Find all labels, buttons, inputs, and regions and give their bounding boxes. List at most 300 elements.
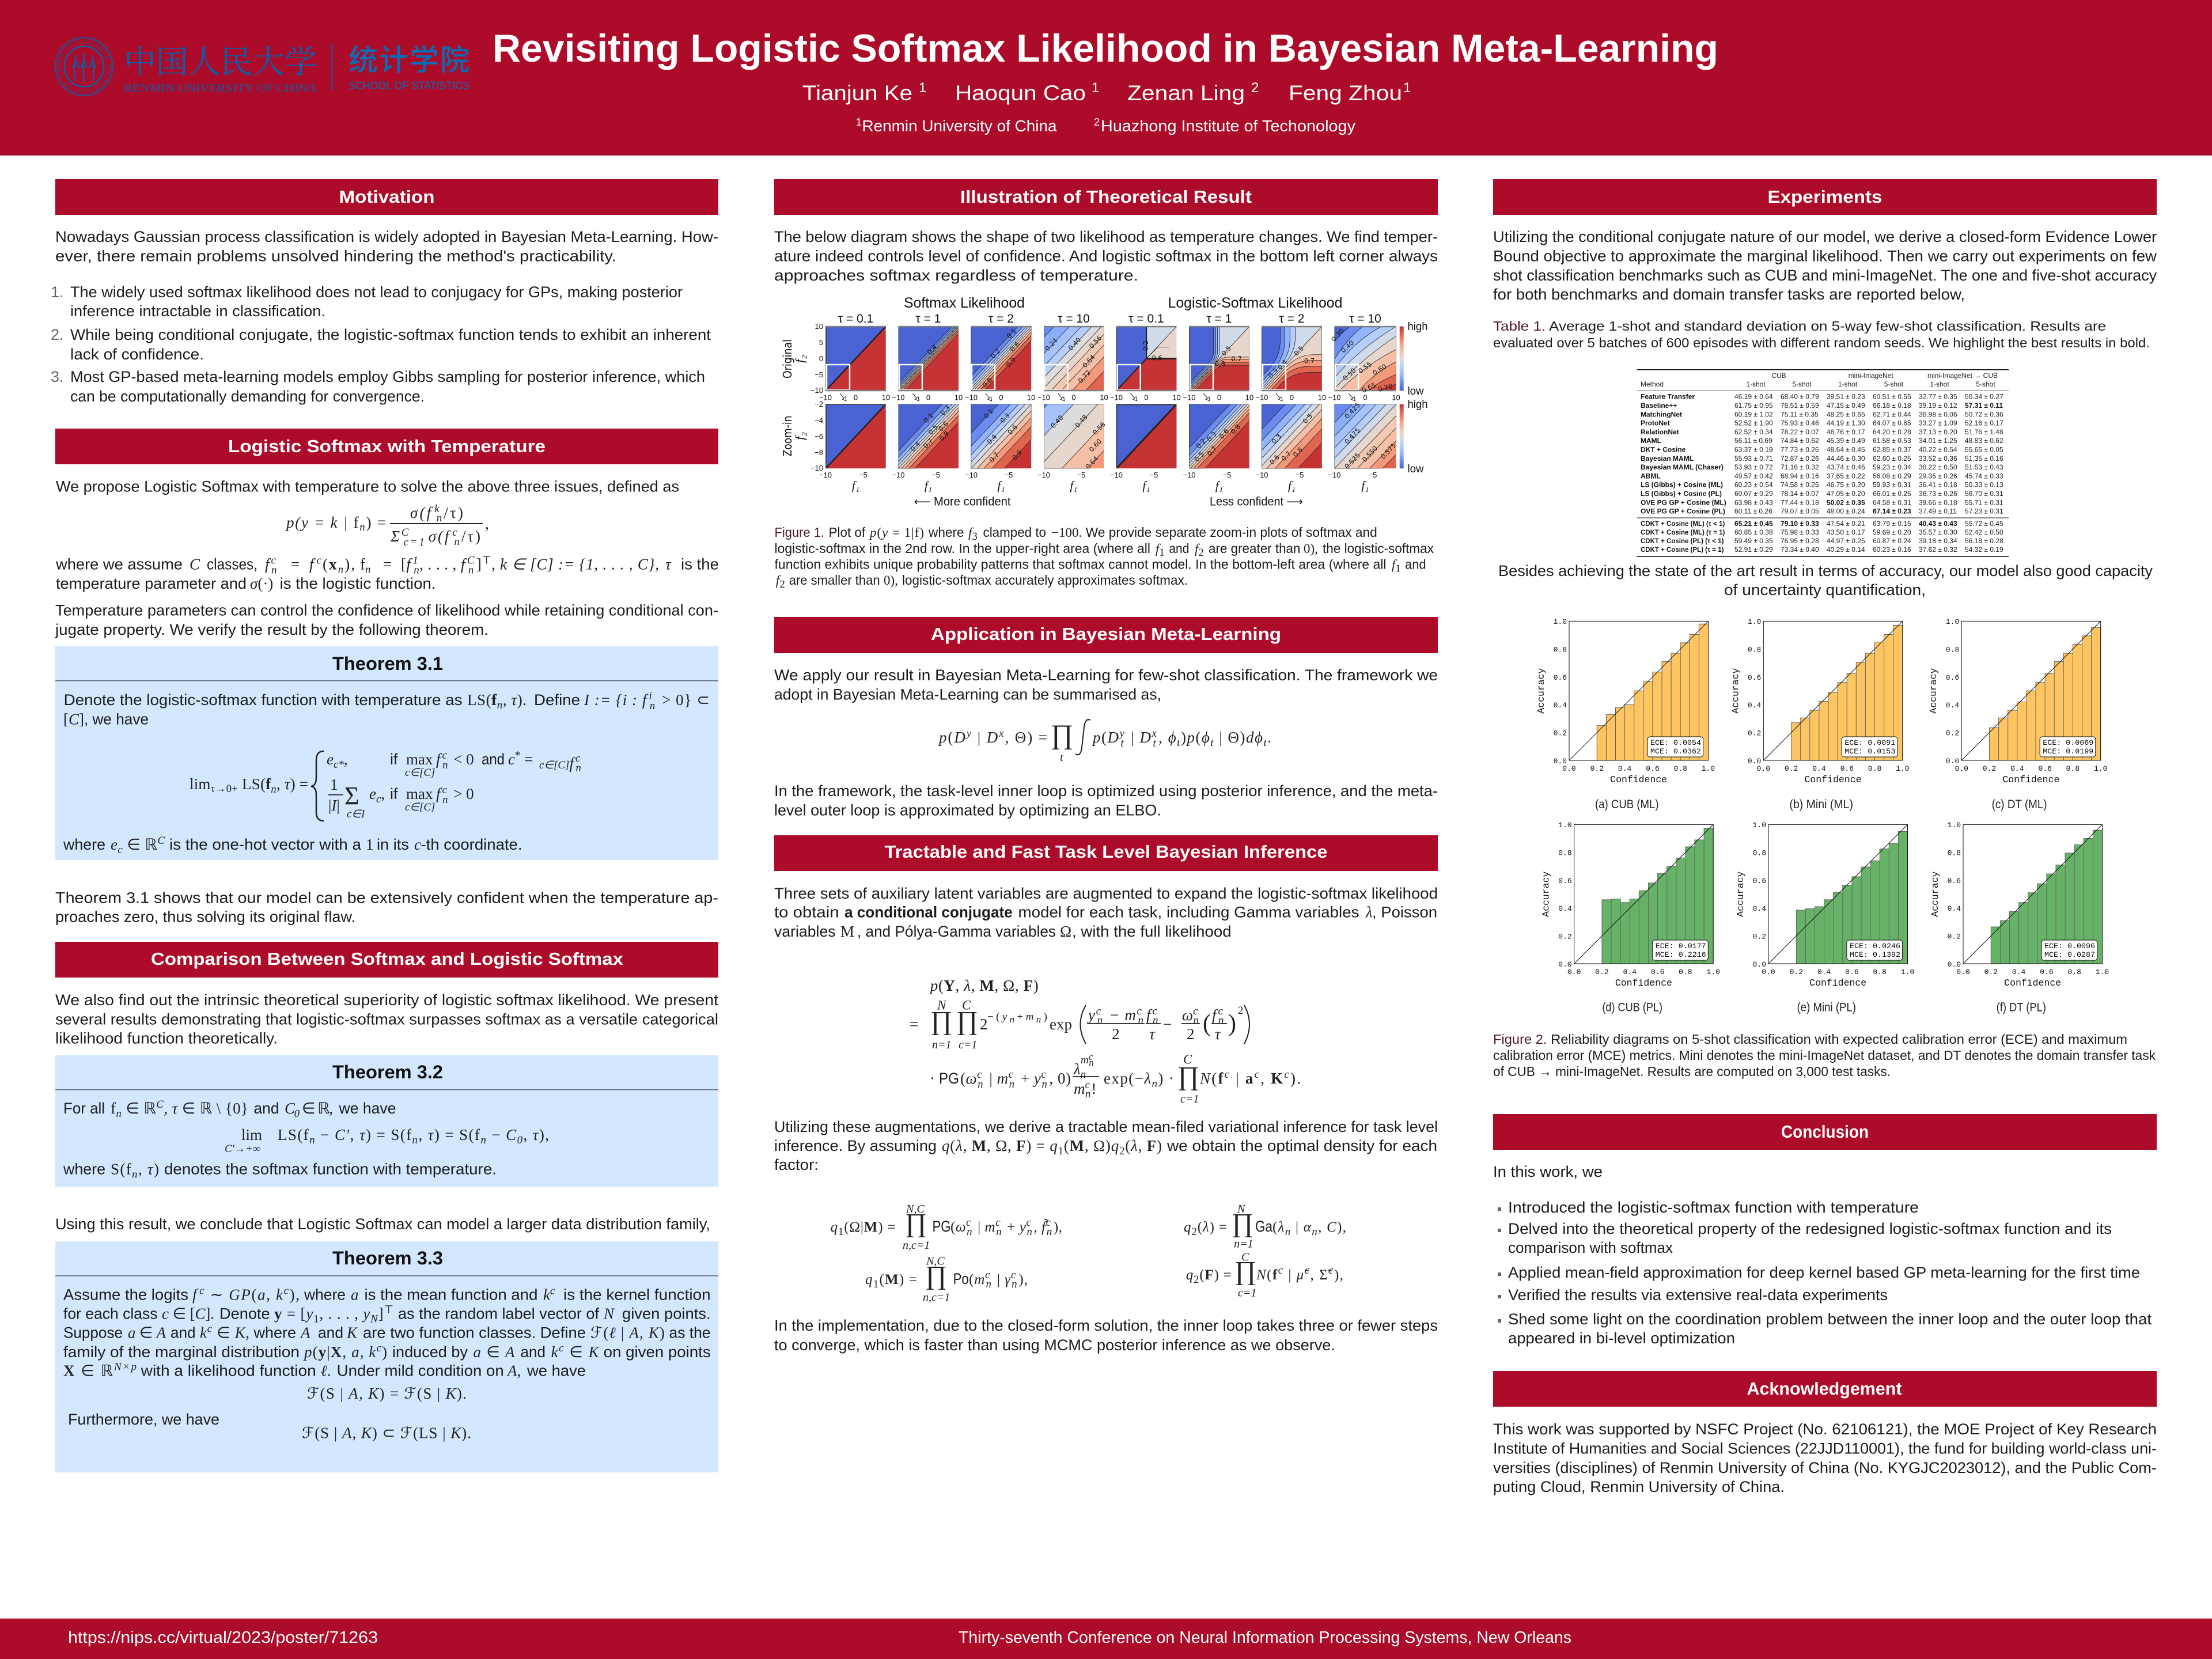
equation: full likelihood: ) bbox=[1044, 1011, 1047, 1023]
text: utilizing augmentations: factor: bbox=[774, 1156, 819, 1173]
chart: reliability CUB (PL): 0.8 bbox=[1558, 849, 1572, 857]
equation: q1 factors: 1 bbox=[838, 1226, 843, 1238]
chart: reliability DT (ML): 0.2 bbox=[1946, 729, 1959, 737]
equation: q1 factors: f̃ bbox=[1041, 1219, 1046, 1235]
table rows: ABML bbox=[1641, 472, 1661, 480]
subcaptions: ML row: (c) DT (ML) bbox=[1992, 798, 2047, 811]
equation: full likelihood: n bbox=[1218, 1014, 1224, 1027]
contour labels: 0.5 bbox=[1301, 412, 1314, 425]
equation: function family inclusion: ℱ(S | A, K) ⊂ ℱ(LS | K). bbox=[302, 1425, 471, 1442]
x axis labels f1 bbox=[852, 479, 1369, 493]
list: three problems: 1. bbox=[51, 283, 64, 301]
theorem 3.3 title: Theorem 3.3 bbox=[332, 1248, 443, 1268]
equation: likelihood definition: σ(f bbox=[410, 504, 431, 521]
equation: meta-learning framework: x bbox=[1152, 728, 1157, 740]
caption: figure 1: 3 bbox=[972, 531, 978, 543]
theorem 3.2 closing line: , bbox=[138, 1161, 147, 1178]
axis ticks: 10 bbox=[1318, 393, 1326, 402]
text: uncertainty quantification bbox=[1498, 562, 2153, 599]
equation: full likelihood: ). bbox=[1290, 1070, 1301, 1087]
chart: reliability DT (PL): 0.2 bbox=[1984, 968, 1998, 976]
equation: limit of logistic-softmax: c bbox=[575, 752, 581, 764]
chart: reliability CUB (ML): 0.2 bbox=[1590, 764, 1604, 773]
text: experiments intro: Bound objective to approximate the marginal likelihood. Then we carry out experiments on few bbox=[1493, 248, 2157, 265]
equation: q2 factors: α bbox=[1304, 1219, 1311, 1235]
equation: softmax limit: C bbox=[506, 1126, 516, 1143]
table rows: 48.64 ± 0.45 bbox=[1827, 446, 1865, 454]
text: uncertainty quantification: of uncertainty quantification, bbox=[1724, 581, 1926, 599]
equation: full likelihood: m bbox=[1081, 1054, 1089, 1066]
equation: full likelihood: exp(−λ bbox=[1104, 1070, 1151, 1087]
table rows: 78.51 ± 0.59 bbox=[1781, 402, 1819, 410]
text: temperature parameters: jugate property. We verify the result by the following theorem. bbox=[55, 621, 488, 638]
equation: limit of logistic-softmax: c bbox=[508, 751, 515, 768]
table rows: 63.37 ± 0.19 bbox=[1734, 446, 1773, 454]
chart: reliability DT (PL): MCE: 0.0287 bbox=[2044, 950, 2095, 959]
theorem 3.3 statement: X ∈ ℝ bbox=[63, 1362, 113, 1380]
theorem 3.3 statement: k bbox=[551, 1343, 558, 1361]
theorem 3.3 statement: K bbox=[589, 1343, 599, 1361]
chart: reliability CUB (ML): 0.4 bbox=[1554, 701, 1567, 710]
equation: q2 factors: c bbox=[1278, 1264, 1283, 1277]
table rows: 61.75 ± 0.95 bbox=[1734, 402, 1773, 410]
equation: q1 factors: c bbox=[1046, 1217, 1051, 1229]
text: using this result: Using this result, we conclude that Logistic Softmax can model a larger data distribution family, bbox=[55, 1215, 710, 1233]
text: assumptions with inline math: ⊤ bbox=[482, 555, 491, 567]
chart: reliability CUB (PL): ECE: 0.0177 bbox=[1656, 942, 1706, 950]
table rows: 48.83 ± 0.62 bbox=[1965, 437, 2003, 445]
contour labels: 0.9 bbox=[1005, 356, 1017, 369]
table header: 1-shot bbox=[1930, 380, 1949, 388]
table rows: 64.20 ± 0.28 bbox=[1873, 428, 1911, 436]
x axis labels f1: f₁ bbox=[997, 479, 1005, 493]
equation: q1 factors: n,c=1 bbox=[903, 1239, 930, 1252]
equation: q2 factors: F) = bbox=[1205, 1267, 1232, 1283]
text: assumptions with inline math: classes, bbox=[207, 556, 257, 573]
chart: reliability DT (PL) bbox=[1930, 821, 2109, 988]
equation: meta-learning framework: x bbox=[998, 728, 1004, 740]
table rows: 78.14 ± 0.07 bbox=[1781, 490, 1819, 498]
chart: reliability CUB (PL): Accuracy bbox=[1541, 871, 1552, 917]
table rows: 50.34 ± 0.27 bbox=[1965, 393, 2003, 401]
chart: reliability DT (ML): 0.2 bbox=[1983, 764, 1996, 773]
equation: limit of logistic-softmax: , bbox=[381, 785, 385, 802]
equation: q2 factors: n=1 bbox=[1234, 1238, 1253, 1251]
text: illustration intro: The below diagram shows the shape of two likelihood as temperature changes. We find temper- bbox=[774, 228, 1438, 245]
equation: q1 factors: γ bbox=[1005, 1272, 1010, 1287]
theorem 3.2 statement: ∈ ℝ bbox=[122, 1100, 156, 1117]
contour labels: 0.50 bbox=[1341, 366, 1358, 382]
axis ticks: 0 bbox=[926, 393, 930, 402]
table rows bbox=[1641, 393, 2003, 554]
table rows: 36.22 ± 0.50 bbox=[1919, 463, 1957, 471]
text: comparison intro bbox=[55, 991, 719, 1047]
theorem 3.3 statement: ∈ bbox=[565, 1343, 588, 1361]
text: conclusion intro: In this work, we bbox=[1493, 1163, 1603, 1180]
equation: full likelihood: n bbox=[1009, 1078, 1014, 1090]
equation: q1 factors: ), bbox=[1054, 1219, 1062, 1235]
heading: Experiments bbox=[1493, 179, 2157, 215]
chart: reliability CUB (PL): 0.0 bbox=[1567, 968, 1581, 976]
x axis labels f1: f₁ bbox=[1361, 479, 1369, 493]
heading: Illustration of Theoretical Result bbox=[774, 179, 1438, 215]
equation: full likelihood: τ bbox=[1215, 1025, 1221, 1043]
table rows: 51.35 ± 0.16 bbox=[1965, 454, 2003, 463]
caption: figure 1: f bbox=[776, 573, 779, 588]
list: three problems bbox=[51, 283, 711, 405]
table rows: 50.33 ± 0.13 bbox=[1965, 481, 2003, 489]
table header: 1-shot bbox=[1838, 380, 1858, 388]
table rows: MAML bbox=[1641, 437, 1661, 445]
equation: full likelihood: exp bbox=[1050, 1016, 1072, 1033]
chart: reliability DT (ML): ECE: 0.0069 bbox=[2043, 738, 2093, 747]
chart: reliability DT (PL): 0.6 bbox=[2040, 968, 2054, 976]
table rows: ProtoNet bbox=[1641, 419, 1670, 427]
equation: meta-learning framework: t bbox=[1263, 737, 1267, 749]
table rows: LS (Gibbs) + Cosine (PL) bbox=[1641, 490, 1722, 498]
chart: reliability Mini (ML): 0.4 bbox=[1812, 764, 1826, 773]
panel: softmax tau 1 original bbox=[899, 327, 959, 390]
table rows: 55.65 ± 0.05 bbox=[1965, 446, 2003, 454]
text: implementation: to converge, which is faster than using MCMC posterior inference as we observe. bbox=[774, 1336, 1335, 1354]
equation: full likelihood: c bbox=[1225, 1069, 1230, 1081]
table rows: 51.76 ± 1.48 bbox=[1965, 428, 2003, 436]
theorem 3.3 statement: c bbox=[559, 1342, 564, 1354]
authors: 1 bbox=[1403, 80, 1411, 96]
figure 1 row labels bbox=[781, 339, 807, 456]
text: comparison intro: several results demonstrating that logistic-softmax surpasses softmax as a versatile categorical bbox=[55, 1011, 718, 1028]
axis ticks: 5 bbox=[819, 338, 823, 347]
table: few-shot classification results: Method bbox=[1641, 380, 1664, 388]
equation: meta-learning framework: ∏ bbox=[1051, 719, 1074, 750]
axis ticks: −10 bbox=[1037, 393, 1050, 402]
text: assumptions with inline math: f bbox=[461, 556, 465, 573]
equation: q1 factors: , bbox=[1034, 1219, 1041, 1235]
equation: limit of logistic-softmax: n bbox=[442, 794, 448, 806]
theorem 3.3 statement: c ∈ [C]. bbox=[162, 1305, 214, 1322]
chart: reliability Mini (PL) bbox=[1735, 821, 1914, 988]
theorem 3.3 statement: ∼ bbox=[205, 1286, 228, 1304]
text: assumptions with inline math: n bbox=[414, 565, 419, 577]
equation: full likelihood: c bbox=[1255, 1069, 1260, 1081]
authors: 2 bbox=[1251, 80, 1259, 96]
equation: q2 factors: n bbox=[1285, 1226, 1290, 1238]
figure 1 row labels: Zoom-in bbox=[781, 416, 794, 456]
chart: reliability CUB (ML): 0.8 bbox=[1673, 764, 1687, 773]
table rows: OVE PG GP + Cosine (ML) bbox=[1641, 498, 1726, 506]
caption: figure 1: f bbox=[1156, 541, 1159, 556]
theorem 3.3 statement: N bbox=[603, 1305, 615, 1322]
equation: full likelihood: ! bbox=[1091, 1080, 1096, 1097]
theorem 3.1 statement: [C] bbox=[63, 711, 84, 728]
equation: q2 factors: | bbox=[1291, 1219, 1303, 1235]
text: implementation: In the implementation, due to the closed-form solution, the inner loop takes three or fewer steps bbox=[774, 1317, 1438, 1334]
footer link: https://nips.cc/virtual/2023/poster/71263 bbox=[68, 1628, 378, 1647]
contour labels: 0.5 bbox=[1292, 344, 1305, 357]
text: auxiliary variables: , and Pólya-Gamma variables bbox=[857, 923, 1056, 940]
table rows: 56.08 ± 0.29 bbox=[1873, 472, 1911, 480]
table rows: 59.49 ± 0.35 bbox=[1734, 537, 1773, 545]
text: assumptions with inline math: 1 bbox=[412, 555, 418, 567]
caption: figure 1: 2 bbox=[1198, 547, 1204, 559]
text: assumptions with inline math: [f bbox=[401, 556, 411, 573]
equation: full likelihood: n bbox=[1085, 1088, 1090, 1100]
chart: reliability DT (ML): 1.0 bbox=[2094, 764, 2107, 773]
equation: q1 factors: ), bbox=[1019, 1272, 1028, 1287]
axis ticks: 10 bbox=[1172, 393, 1181, 402]
theorem 3.2 statement: we have bbox=[339, 1100, 396, 1117]
table rows: 62.52 ± 0.34 bbox=[1734, 428, 1773, 436]
equation: full likelihood: c bbox=[977, 1069, 982, 1081]
table rows: 64.07 ± 0.65 bbox=[1873, 419, 1911, 427]
colorbars: high bbox=[1408, 399, 1427, 411]
caption: figure 1 bbox=[774, 525, 1434, 590]
table rows: 34.01 ± 1.25 bbox=[1919, 437, 1957, 445]
table rows: Baseline++ bbox=[1641, 402, 1677, 410]
equation: meta-learning framework: ) bbox=[1181, 729, 1186, 746]
theorem 3.3 statement: c bbox=[284, 1285, 289, 1297]
theorem 3.2 statement: and bbox=[253, 1100, 279, 1117]
panel: softmax tau 2 zoom-in bbox=[971, 404, 1031, 468]
heading: Motivation bbox=[55, 179, 718, 215]
chart: reliability DT (ML): 1.0 bbox=[1946, 618, 1959, 626]
axis ticks: 10 bbox=[1392, 393, 1400, 402]
contour labels: 0.4 bbox=[926, 343, 938, 356]
table rows: 60.07 ± 0.29 bbox=[1734, 490, 1773, 498]
equation: meta-learning framework: t bbox=[1177, 737, 1180, 749]
contour labels: 0.6 bbox=[1218, 427, 1230, 440]
equation: limit of logistic-softmax: max bbox=[406, 751, 433, 768]
equation: likelihood definition: /τ) bbox=[444, 504, 463, 521]
theorem 3.1 statement: i bbox=[649, 690, 652, 702]
caption: figure 1: logistic-softmax in the 2nd row. In the upper-right area (where all bbox=[774, 541, 1150, 556]
axis ticks: −10 bbox=[810, 386, 823, 395]
panel: logistic-softmax tau 2 original bbox=[1262, 326, 1322, 391]
table rows: 52.52 ± 1.90 bbox=[1734, 419, 1773, 427]
theorem 3.3 statement: GP(a, k bbox=[229, 1286, 283, 1304]
panel: logistic-softmax tau 10 zoom-in bbox=[1335, 404, 1396, 468]
table rows: 66.18 ± 0.18 bbox=[1873, 402, 1911, 410]
table header: mini-ImageNet → CUB bbox=[1927, 372, 1998, 380]
chart: reliability Mini (PL): ECE: 0.0246 bbox=[1850, 942, 1900, 950]
theorem 3.2 closing line: S(f bbox=[111, 1161, 131, 1178]
equation: full likelihood: (ω bbox=[960, 1070, 977, 1087]
table rows: 51.53 ± 0.43 bbox=[1965, 463, 2003, 471]
colorbars: high bbox=[1408, 321, 1427, 333]
theorem 3.3 statement: a ∈ A bbox=[474, 1343, 515, 1361]
equation: meta-learning framework: t bbox=[1060, 751, 1063, 764]
figure 1 temperature labels: τ = 2 bbox=[988, 312, 1014, 325]
table rows: 71.16 ± 0.32 bbox=[1781, 463, 1819, 471]
equation: likelihood definition: , bbox=[485, 515, 489, 532]
equation: q2 factors: μ̃ bbox=[1297, 1267, 1304, 1283]
equation: full likelihood: n bbox=[1089, 1057, 1094, 1068]
theorem 3.3 statement: K bbox=[346, 1324, 358, 1341]
table rows: 37.65 ± 0.22 bbox=[1827, 472, 1865, 480]
equation: limit of logistic-softmax: e bbox=[327, 751, 334, 768]
caption: figure 1: −100. bbox=[1051, 525, 1082, 540]
chart: reliability CUB (ML): 0.2 bbox=[1554, 729, 1567, 737]
text: assumptions with inline math: , bbox=[491, 556, 495, 573]
footer band bbox=[0, 1619, 2212, 1659]
chart: reliability CUB (PL): MCE: 0.2216 bbox=[1656, 950, 1706, 959]
theorem 3.3 statement: as the bbox=[669, 1324, 711, 1341]
authors: 1 bbox=[1092, 80, 1099, 96]
text: application intro: We apply our result in Bayesian Meta-Learning for few-shot classification. The framework we bbox=[774, 666, 1438, 684]
contour labels: 0.30 bbox=[1330, 327, 1346, 343]
equation: limit of logistic-softmax: n bbox=[271, 783, 276, 796]
text: utilizing augmentations: q(λ, M, Ω, F) = q bbox=[942, 1137, 1058, 1154]
equation: full likelihood: | bbox=[985, 1070, 997, 1087]
table rows: 29.35 ± 0.26 bbox=[1919, 472, 1957, 480]
theorem 3.3 statement: k bbox=[200, 1324, 207, 1341]
theorem 3.1 closing line: where bbox=[63, 836, 105, 853]
axis ticks: 0 bbox=[819, 354, 823, 363]
table rows: 56.70 ± 0.31 bbox=[1965, 490, 2003, 498]
figure 1 temperature labels: τ = 1 bbox=[1207, 312, 1232, 325]
equation: meta-learning framework: t bbox=[1120, 737, 1124, 749]
table rows: 75.98 ± 0.33 bbox=[1781, 528, 1819, 536]
table rows: CDKT + Cosine (ML) (τ < 1) bbox=[1641, 521, 1725, 528]
table rows: 78.22 ± 0.07 bbox=[1781, 428, 1819, 436]
header band bbox=[0, 0, 2212, 156]
equation: limit of logistic-softmax: c bbox=[376, 793, 381, 805]
text: experiments intro bbox=[1493, 228, 2157, 303]
contour labels: 0.550 bbox=[1361, 444, 1379, 464]
theorem 3.2 statement: f bbox=[111, 1100, 116, 1117]
equation: limit of logistic-softmax: e bbox=[369, 785, 376, 802]
contour labels: 0.40 bbox=[1049, 414, 1065, 430]
equation: limit of logistic-softmax: , bbox=[344, 751, 348, 768]
axis ticks: −10 bbox=[1328, 471, 1341, 479]
equation: q1 factors: y bbox=[1020, 1219, 1026, 1235]
equation: q2 factors: c=1 bbox=[1238, 1287, 1256, 1300]
equation: softmax limit: , bbox=[418, 1126, 427, 1143]
axis ticks: −10 bbox=[1183, 471, 1196, 479]
chart: reliability Mini (ML): 0.4 bbox=[1748, 701, 1761, 710]
chart: reliability Mini (PL): 0.4 bbox=[1753, 904, 1766, 913]
figure 1 temperature labels: τ = 0.1 bbox=[838, 312, 873, 325]
equation: q1 factors: m bbox=[985, 1219, 995, 1235]
table rows: 43.50 ± 0.17 bbox=[1827, 528, 1865, 536]
table rows: 40.22 ± 0.54 bbox=[1919, 446, 1957, 454]
subcaptions: ML row bbox=[1595, 798, 2047, 811]
x axis labels f1: f₁ bbox=[1288, 479, 1296, 493]
chart: reliability CUB (ML): 1.0 bbox=[1554, 618, 1567, 626]
x axis labels f1: f₁ bbox=[925, 479, 932, 493]
logo: divider and school of statistics: 统计学院 bbox=[349, 36, 469, 79]
theorem 3.2 statement: ∈ ℝ, bbox=[299, 1100, 333, 1117]
chart: reliability CUB (PL): 0.4 bbox=[1558, 904, 1572, 913]
chart: reliability CUB (ML): 0.4 bbox=[1618, 764, 1631, 773]
theorem 3.2 statement bbox=[63, 1099, 396, 1120]
table rows: 56.11 ± 0.69 bbox=[1734, 437, 1772, 445]
equation: limit of logistic-softmax: |I| bbox=[328, 797, 340, 814]
equation: softmax limit: n bbox=[412, 1134, 418, 1146]
chart: reliability DT (PL): 0.8 bbox=[1948, 849, 1961, 857]
theorem 3.1 statement: , we have bbox=[84, 711, 149, 728]
equation: limit of logistic-softmax: lim bbox=[190, 775, 210, 793]
equation: q1 factors: ∏ bbox=[925, 1260, 947, 1290]
equation: full likelihood: a bbox=[1245, 1070, 1253, 1087]
text: assumptions with inline math: is the logistic function. bbox=[280, 575, 436, 592]
equation: q1 factors: 1 bbox=[873, 1278, 878, 1290]
table rows: 77.73 ± 0.26 bbox=[1781, 446, 1819, 454]
theorem 3.3 statement: are two function classes. Define bbox=[363, 1324, 586, 1341]
axis ticks: 10 bbox=[955, 393, 963, 402]
axis ticks: 0 bbox=[1071, 393, 1076, 402]
chart: reliability Mini (ML): 0.6 bbox=[1840, 764, 1854, 773]
equation: q1 factors: PG bbox=[932, 1218, 950, 1235]
equation: limit of logistic-softmax: Σ bbox=[344, 782, 359, 810]
theorem 3.3 statement: induced by bbox=[392, 1343, 468, 1361]
table rows: 63.98 ± 0.43 bbox=[1734, 498, 1773, 506]
contour labels: 0.8 bbox=[1215, 360, 1225, 368]
text: auxiliary variables: Three sets of auxiliary latent variables are augmented to expand the logistic-softmax likelihood bbox=[774, 885, 1438, 902]
contour labels: 0.2 bbox=[1142, 340, 1150, 351]
theorem 3.3 statement: c bbox=[550, 1285, 555, 1297]
equation: full likelihood: n bbox=[1036, 1014, 1041, 1025]
chart: reliability CUB (ML): 0.0 bbox=[1562, 764, 1576, 773]
equation: q1 factors: ∏ bbox=[905, 1208, 927, 1237]
contour labels: 0.475 bbox=[1343, 426, 1362, 446]
axis ticks: −10 bbox=[965, 471, 978, 479]
chart: reliability Mini (ML): Confidence bbox=[1804, 774, 1862, 785]
equation: likelihood definition: p(y = k | f bbox=[286, 514, 359, 531]
chart: reliability CUB (PL): Confidence bbox=[1615, 978, 1672, 988]
theorem 3.3 statement: p(y|X, a, k bbox=[304, 1343, 376, 1361]
equation: limit of logistic-softmax: τ→0+ bbox=[211, 783, 238, 795]
figure 1 row labels: f₂ bbox=[793, 432, 807, 440]
chart: reliability Mini (PL): 0.2 bbox=[1790, 968, 1803, 976]
caption: figure 1: f bbox=[1195, 541, 1198, 556]
heading: Conclusion bbox=[1493, 1114, 2157, 1150]
theorem 3.2 title: Theorem 3.2 bbox=[332, 1062, 443, 1082]
table rows: 55.93 ± 0.71 bbox=[1734, 454, 1773, 463]
list: three problems: 2. bbox=[51, 326, 64, 343]
equation: limit of logistic-softmax: f bbox=[436, 785, 441, 802]
equation: q1 factors: M) = bbox=[864, 1219, 896, 1235]
figure 1 group titles bbox=[904, 295, 1342, 311]
contour labels: 0.3 bbox=[1205, 430, 1218, 443]
logo: university wordmark: RENMIN UNIVERSITY OF CHINA bbox=[124, 82, 317, 94]
table rows: CDKT + Cosine (PL) (τ < 1) bbox=[1641, 538, 1724, 545]
equation: full likelihood: c bbox=[1009, 1069, 1014, 1081]
table rows: 36.98 ± 0.06 bbox=[1919, 410, 1957, 418]
theorem 3.1 statement: > 0} ⊂ bbox=[657, 691, 710, 709]
equation: full likelihood: 2 bbox=[1187, 1025, 1195, 1043]
table rows: 39.51 ± 0.23 bbox=[1827, 393, 1865, 401]
chart: reliability Mini (ML): 0.8 bbox=[1748, 645, 1761, 654]
contour labels: 0.1 bbox=[982, 407, 995, 420]
text: assumptions with inline math: σ(·) bbox=[250, 575, 273, 592]
equation: full likelihood: n bbox=[1097, 1014, 1103, 1027]
figure 1 temperature labels bbox=[838, 312, 1381, 325]
table rows: 56.18 ± 0.28 bbox=[1965, 537, 2003, 545]
equation: q1 factors: + bbox=[1003, 1219, 1019, 1235]
theorem 3.2 statement: τ ∈ ℝ \ {0} bbox=[172, 1100, 248, 1117]
table rows: 61.58 ± 0.53 bbox=[1873, 437, 1911, 445]
equation: q1 factors: (m bbox=[969, 1272, 984, 1287]
panel: logistic-softmax tau 10 original bbox=[1334, 326, 1396, 390]
chart: reliability CUB (ML): Confidence bbox=[1610, 774, 1667, 785]
axis ticks: −10 bbox=[1328, 393, 1341, 402]
theorem 3.3 statement: and bbox=[318, 1324, 343, 1341]
axis ticks: −5 bbox=[1296, 471, 1304, 479]
text: motivation intro bbox=[55, 228, 718, 265]
theorem 3.3 statement: is the kernel function bbox=[563, 1286, 711, 1304]
equation: q1 factors: n,c=1 bbox=[923, 1291, 950, 1304]
